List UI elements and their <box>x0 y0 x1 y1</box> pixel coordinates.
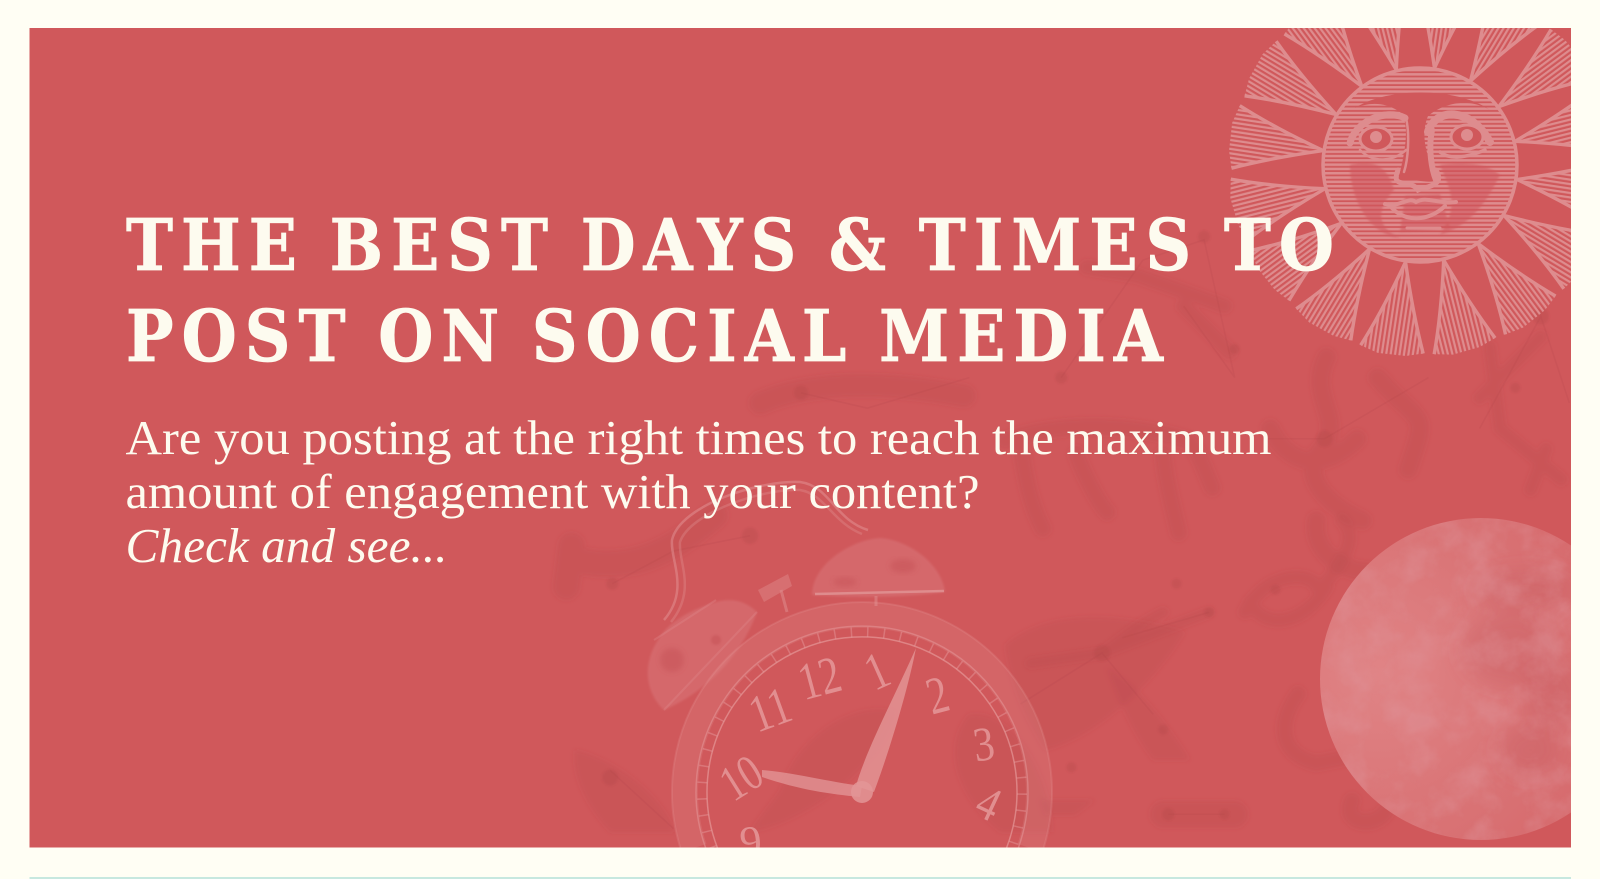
clock numerals: 2 <box>920 665 955 726</box>
intro text: Are you posting at the right times to reach the maximum <box>126 410 1272 465</box>
constellation silhouettes <box>1330 513 1352 573</box>
intro text <box>126 410 1272 573</box>
sun face <box>1322 67 1518 263</box>
clock numerals: 9 <box>738 816 764 867</box>
clock numerals: 12 <box>792 646 847 712</box>
title: POST ON SOCIAL MEDIA <box>126 294 1171 378</box>
eyes <box>1350 114 1490 228</box>
intro text: Check and see... <box>126 518 448 573</box>
title <box>126 203 1342 378</box>
clock numerals: 3 <box>970 716 998 772</box>
clock numerals: 4 <box>968 775 1010 832</box>
icon: moon <box>1320 518 1571 840</box>
clock numerals: 1 <box>856 641 899 702</box>
constellation stars and lines <box>610 240 1569 829</box>
title: THE BEST DAYS & TIMES TO <box>126 203 1342 287</box>
sun rays <box>1229 28 1571 356</box>
clock numerals: 11 <box>742 676 799 744</box>
clock case <box>672 602 1052 848</box>
clock numerals: 10 <box>710 744 773 812</box>
clock bells <box>648 538 945 710</box>
clock hands <box>762 648 916 803</box>
icon: alarm clock <box>648 482 1052 867</box>
clock numerals <box>722 654 1001 848</box>
dark leaf shapes <box>1110 671 1136 704</box>
clock handle <box>664 482 868 620</box>
icon: sun engraving <box>1229 28 1571 356</box>
intro text: amount of engagement with your content? <box>126 464 979 519</box>
background art clipped to panel <box>602 28 1571 848</box>
